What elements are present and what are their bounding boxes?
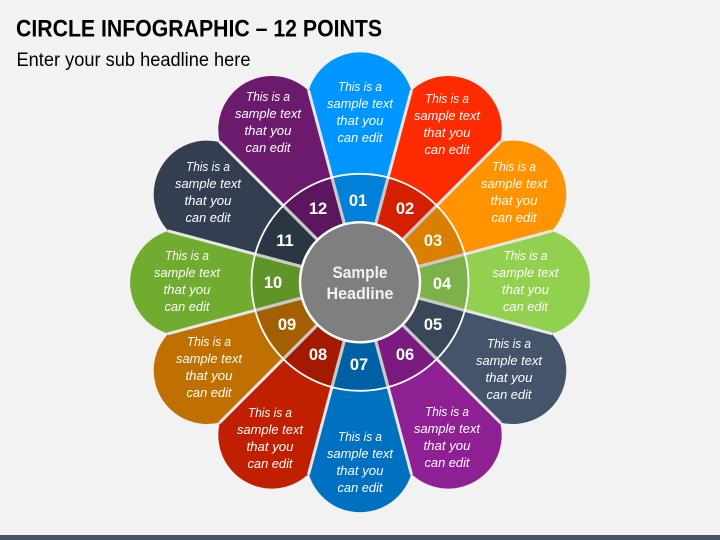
petal 12 — [201, 58, 404, 308]
text 12: can edit — [246, 140, 292, 155]
text 12: that you — [244, 123, 292, 138]
text 11: that you — [184, 193, 232, 208]
text 08: can edit — [248, 456, 294, 471]
petal 07 — [309, 282, 411, 512]
numbers: 07 — [350, 356, 368, 374]
center headline: Sample — [332, 264, 388, 282]
numbers: 10 — [264, 274, 282, 292]
numbers: 06 — [396, 346, 414, 364]
text 01: sample text — [327, 96, 394, 111]
text 11: sample text — [175, 176, 242, 191]
text 11 — [175, 159, 242, 225]
text 04 — [492, 248, 560, 314]
petal 06 — [316, 257, 519, 507]
text 08: This is a — [248, 405, 292, 420]
text 07: can edit — [338, 480, 384, 495]
text 02 — [414, 91, 481, 157]
text 07 — [327, 429, 394, 495]
petal 09 — [135, 238, 386, 442]
petal 03 — [334, 123, 585, 327]
text 09: sample text — [176, 351, 243, 366]
petal 10 — [130, 231, 360, 334]
center headline: Headline — [326, 285, 394, 303]
text 04: can edit — [503, 299, 549, 314]
text 03: can edit — [492, 210, 538, 225]
numbers: 08 — [309, 346, 327, 364]
outer ring outline — [252, 174, 468, 391]
text 02: that you — [424, 125, 470, 140]
numbers: 02 — [396, 200, 414, 218]
text 10: sample text — [154, 265, 221, 280]
numbers: 11 — [276, 232, 294, 250]
text 07: that you — [336, 463, 384, 478]
text 03 — [481, 159, 548, 225]
text 10 — [154, 248, 221, 314]
circle diagram — [130, 52, 590, 512]
text 12: This is a — [246, 89, 290, 104]
text 01: that you — [336, 113, 384, 128]
text 04: sample text — [492, 265, 560, 280]
text 06: sample text — [414, 421, 481, 436]
numbers: 05 — [424, 316, 442, 334]
text 01: can edit — [338, 130, 384, 145]
text 10: can edit — [164, 299, 211, 314]
text 10: that you — [164, 282, 210, 297]
text 07: sample text — [327, 446, 394, 461]
text 02: sample text — [414, 108, 481, 123]
numbers: 12 — [309, 200, 327, 218]
text 01: This is a — [338, 79, 382, 94]
text 06: that you — [424, 438, 470, 453]
subtitle: Enter your sub headline here — [16, 50, 250, 71]
petal 05 — [334, 238, 585, 442]
numbers: 09 — [278, 316, 296, 334]
text 11: can edit — [186, 210, 232, 225]
text 05: that you — [486, 370, 532, 385]
numbers — [264, 192, 452, 374]
petal 02 — [316, 58, 519, 308]
text 06: This is a — [425, 404, 469, 419]
center circle — [300, 222, 420, 342]
petals — [130, 52, 590, 512]
numbers: 03 — [424, 232, 442, 250]
text 12: sample text — [235, 106, 302, 121]
text 04: This is a — [504, 248, 548, 263]
text 09: that you — [186, 368, 232, 383]
text 02: This is a — [425, 91, 469, 106]
text 09: This is a — [187, 334, 231, 349]
center headline — [326, 264, 394, 303]
text 06: can edit — [424, 455, 471, 470]
text 03: sample text — [481, 176, 548, 191]
text 11: This is a — [186, 159, 230, 174]
text 05: This is a — [487, 336, 531, 351]
petal 08 — [201, 257, 404, 507]
text 07: This is a — [338, 429, 382, 444]
text 09: can edit — [186, 385, 233, 400]
numbers: 04 — [433, 275, 452, 293]
title: CIRCLE INFOGRAPHIC – 12 POINTS — [16, 16, 382, 42]
text 06 — [414, 404, 481, 470]
petal 01 — [309, 52, 411, 282]
numbers: 01 — [349, 192, 367, 210]
text 05: can edit — [486, 387, 533, 402]
footer bar — [0, 535, 720, 540]
text 01 — [327, 79, 394, 145]
ring segments — [251, 174, 469, 391]
text 12 — [235, 89, 302, 155]
petal 11 — [135, 123, 386, 327]
text 05: sample text — [476, 353, 543, 368]
petal 04 — [360, 231, 590, 334]
text 02: can edit — [424, 142, 471, 157]
text 04: that you — [502, 282, 549, 297]
text 08: sample text — [237, 422, 304, 437]
text 08 — [237, 405, 304, 471]
text 05 — [476, 336, 543, 402]
text 10: This is a — [165, 248, 209, 263]
text 09 — [176, 334, 243, 400]
text 03: This is a — [492, 159, 536, 174]
text 03: that you — [490, 193, 538, 208]
text 08: that you — [246, 439, 294, 454]
